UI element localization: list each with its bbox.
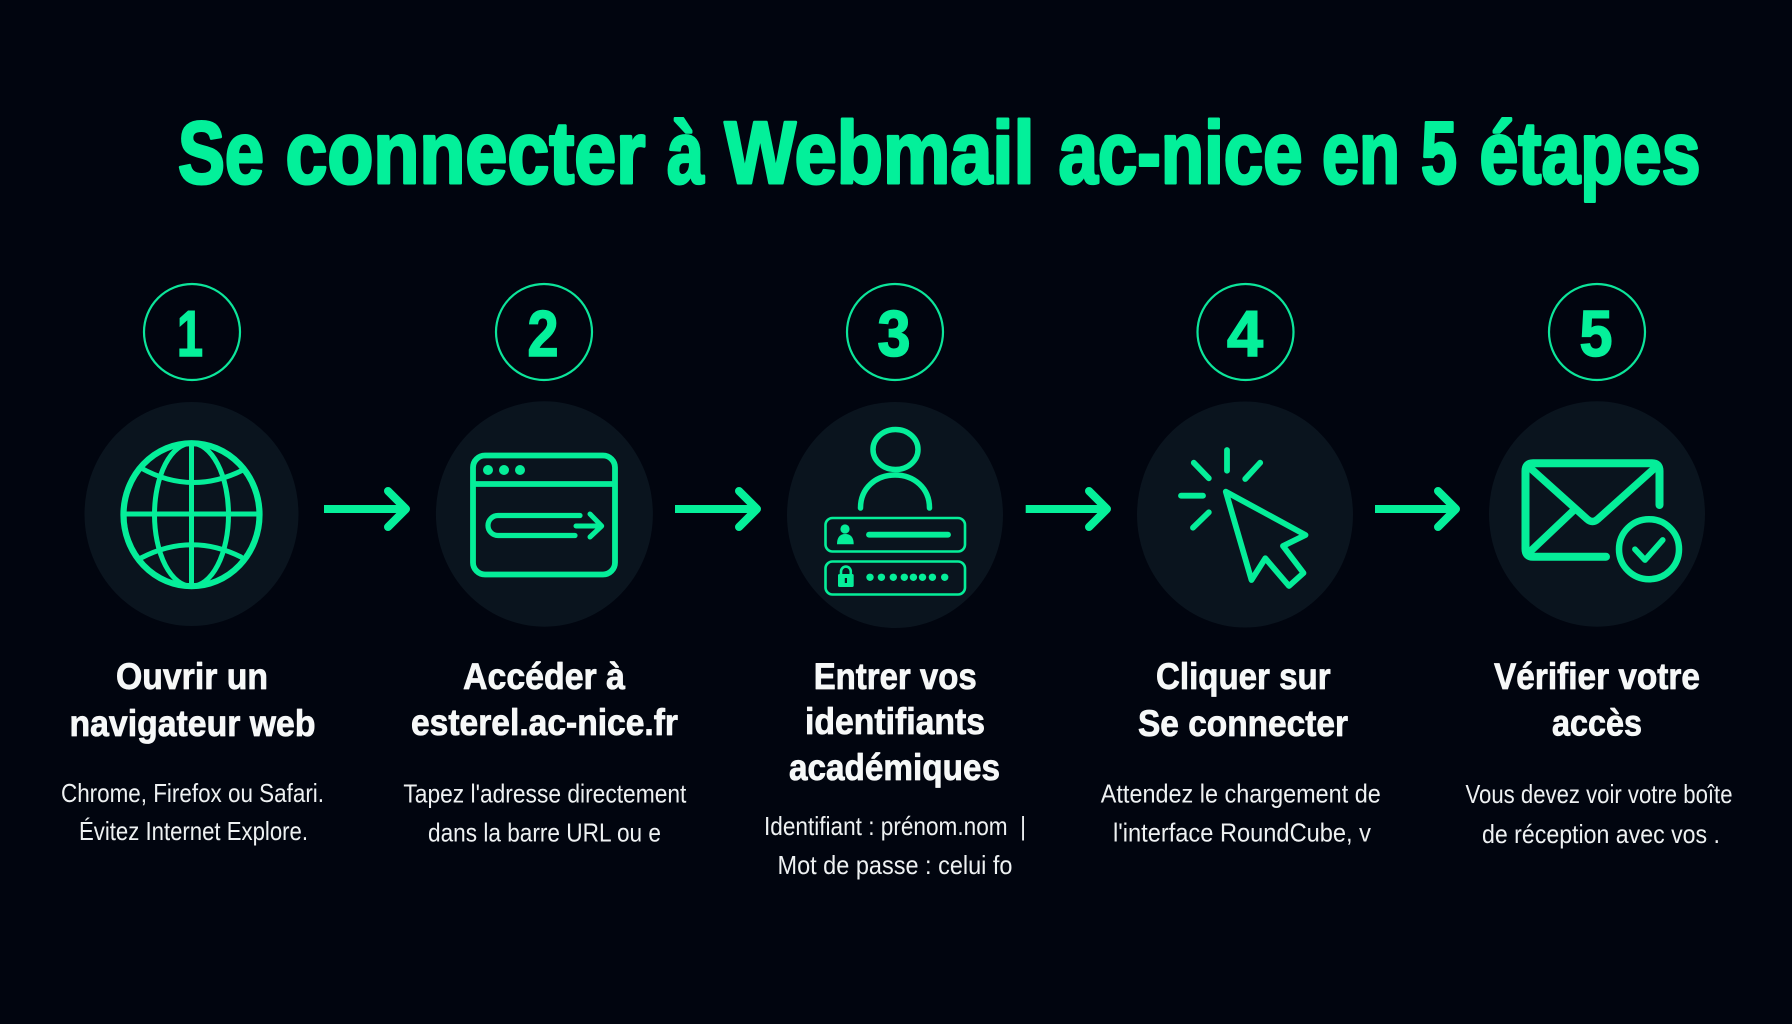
panel: step 2 xyxy=(403,284,687,848)
number badge 3: 3 xyxy=(878,297,910,370)
description: step 3: Identifiant : prénom.nom | xyxy=(764,811,1026,841)
description: step 5: de réception avec vos . xyxy=(1482,819,1720,849)
title: Se xyxy=(178,103,264,202)
title: en xyxy=(1322,103,1400,202)
icon: globe xyxy=(84,402,298,626)
description: step 4: Attendez le chargement de xyxy=(1101,778,1381,808)
panel: step 5 xyxy=(1466,284,1732,849)
heading: step 2 xyxy=(411,656,678,743)
description: step 3: Mot de passe : celui fo xyxy=(778,850,1012,880)
description: step 1 xyxy=(61,778,324,846)
number badge 4 xyxy=(1198,284,1294,380)
title: connecter xyxy=(286,103,646,202)
arrow 2 to 3 xyxy=(675,491,757,527)
arrow 3 to 4 xyxy=(1026,491,1107,527)
description: step 2: Tapez l'adresse directement xyxy=(403,778,687,808)
heading: step 3: identifiants xyxy=(805,701,985,742)
icon: envelope with check mark xyxy=(1489,401,1705,627)
panel: step 3 xyxy=(764,284,1026,880)
heading: step 4 xyxy=(1138,656,1348,744)
title: Webmail xyxy=(724,103,1034,202)
heading: step 5: Vérifier votre xyxy=(1494,656,1700,697)
number badge 1: 1 xyxy=(177,297,203,370)
title: ac-nice xyxy=(1058,103,1302,202)
panel: step 1 xyxy=(61,284,324,846)
heading: step 3: académiques xyxy=(789,747,1000,788)
title: à xyxy=(667,103,705,202)
heading: step 2: esterel.ac-nice.fr xyxy=(411,702,678,743)
description: step 2 xyxy=(403,778,687,848)
description: step 5: Vous devez voir votre boîte xyxy=(1466,779,1732,809)
number badge 2 xyxy=(496,284,592,380)
heading: step 1 xyxy=(70,656,316,744)
number badge 3 xyxy=(847,284,943,380)
heading: step 2: Accéder à xyxy=(463,656,625,697)
description: step 1: Chrome, Firefox ou Safari. xyxy=(61,778,324,808)
icon: mouse cursor click xyxy=(1137,402,1353,628)
heading: step 4: Cliquer sur xyxy=(1156,656,1331,697)
description: step 2: dans la barre URL ou e xyxy=(428,818,661,848)
title: 5 xyxy=(1421,103,1457,202)
description: step 3 xyxy=(764,811,1026,880)
number badge 2: 2 xyxy=(528,297,558,370)
icon: user login form xyxy=(787,402,1003,628)
description: step 5 xyxy=(1466,779,1732,849)
number badge 1 xyxy=(144,284,240,380)
heading: step 1: Ouvrir un xyxy=(116,656,268,697)
number badge 5: 5 xyxy=(1580,297,1612,370)
heading: step 1: navigateur web xyxy=(70,703,316,744)
heading: step 5 xyxy=(1494,656,1700,744)
description: step 1: Évitez Internet Explore. xyxy=(79,816,308,846)
heading: step 3: Entrer vos xyxy=(814,656,977,697)
arrow 1 to 2 xyxy=(324,491,406,527)
number badge 4: 4 xyxy=(1227,297,1263,370)
heading: step 3 xyxy=(789,656,1000,788)
heading: step 4: Se connecter xyxy=(1138,703,1348,744)
arrow 4 to 5 xyxy=(1375,491,1456,527)
icon: browser window xyxy=(436,401,653,627)
description: step 4 xyxy=(1101,778,1381,848)
title: étapes xyxy=(1480,103,1700,202)
description: step 4: l'interface RoundCube, v xyxy=(1113,818,1371,848)
heading: step 5: accès xyxy=(1552,703,1642,744)
panel: step 4 xyxy=(1101,284,1381,848)
number badge 5 xyxy=(1549,284,1645,380)
